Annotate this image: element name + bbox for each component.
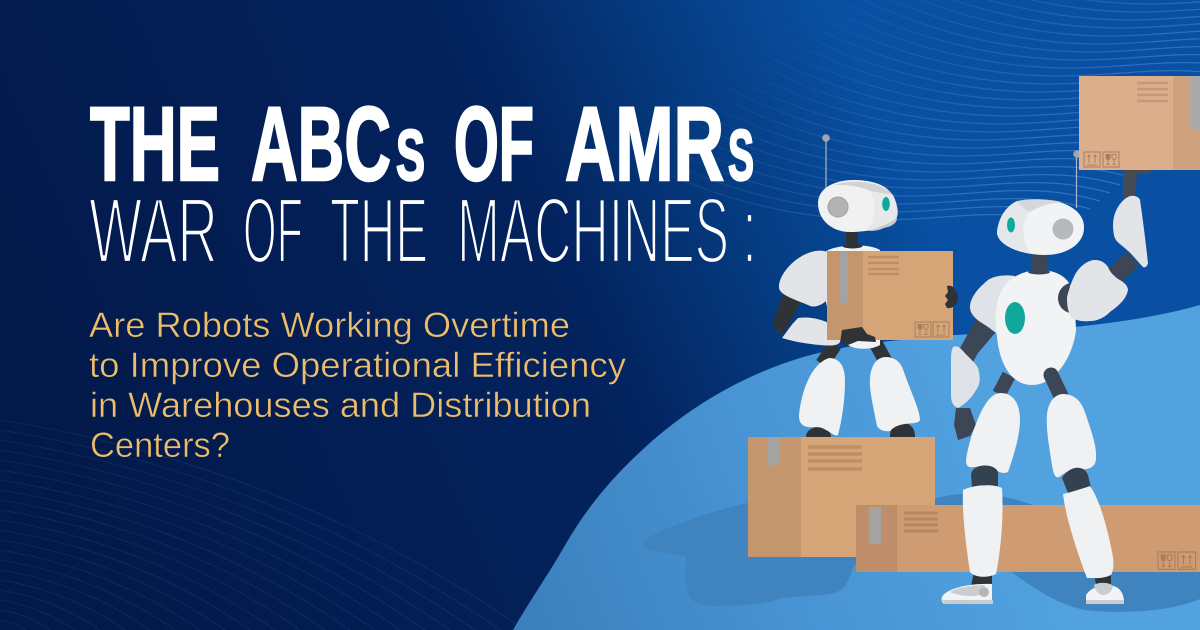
light blue wave floor: [513, 305, 1200, 630]
right leg: [1047, 394, 1124, 604]
antenna: [822, 134, 830, 190]
raised arm: [1058, 196, 1148, 321]
subtitle: War of the Machines: [89, 178, 757, 282]
hands: [840, 286, 958, 345]
arm, viewer left: [951, 275, 1015, 440]
left leg: [942, 393, 1020, 604]
floor shadows: [644, 494, 1200, 612]
title: The ABCs of AMRs: OF: [454, 86, 534, 203]
chest light: [1005, 302, 1025, 334]
box carried: [827, 251, 953, 340]
question text: [89, 305, 626, 465]
collar: [1028, 270, 1050, 274]
wavy line pattern: top right: [550, 0, 1200, 225]
title: The ABCs of AMRs: [90, 86, 754, 203]
question text: Centers?: [90, 425, 230, 465]
wavy line pattern: bottom left: [0, 420, 525, 630]
robot: right, lifting box: [942, 76, 1200, 604]
arm, viewer left: [773, 251, 841, 346]
antenna: [1073, 150, 1081, 208]
lifted box: [1079, 76, 1200, 200]
question text: to Improve Operational Efficiency: [89, 345, 626, 385]
box: large left stack: [748, 437, 935, 557]
box: long bottom box: [856, 505, 1200, 572]
title: The ABCs of AMRs: S: [396, 117, 425, 196]
head: [818, 180, 898, 232]
torso: [996, 270, 1076, 385]
left hip: [999, 375, 1009, 394]
title: The ABCs of AMRs: ABC: [251, 86, 391, 203]
question text: Are Robots Working Overtime: [89, 305, 570, 345]
right hip: [1051, 375, 1061, 396]
legs: [799, 342, 920, 437]
subtitle: War of the Machines: THE: [330, 178, 428, 282]
subtitle: War of the Machines: WAR: [89, 178, 218, 282]
head: [997, 199, 1084, 255]
neck: [842, 230, 862, 248]
title: The ABCs of AMRs: THE: [90, 86, 220, 203]
subtitle: War of the Machines: MACHINES: [457, 178, 729, 282]
title: The ABCs of AMRs: S: [728, 117, 754, 196]
neck: [1032, 253, 1047, 272]
subtitle: War of the Machines: :: [742, 178, 757, 282]
subtitle: War of the Machines: OF: [243, 178, 303, 282]
torso: [823, 245, 880, 349]
title: The ABCs of AMRs: AMR: [565, 86, 724, 203]
question text: in Warehouses and Distribution: [90, 385, 591, 425]
robot: left, on box: [773, 134, 958, 437]
